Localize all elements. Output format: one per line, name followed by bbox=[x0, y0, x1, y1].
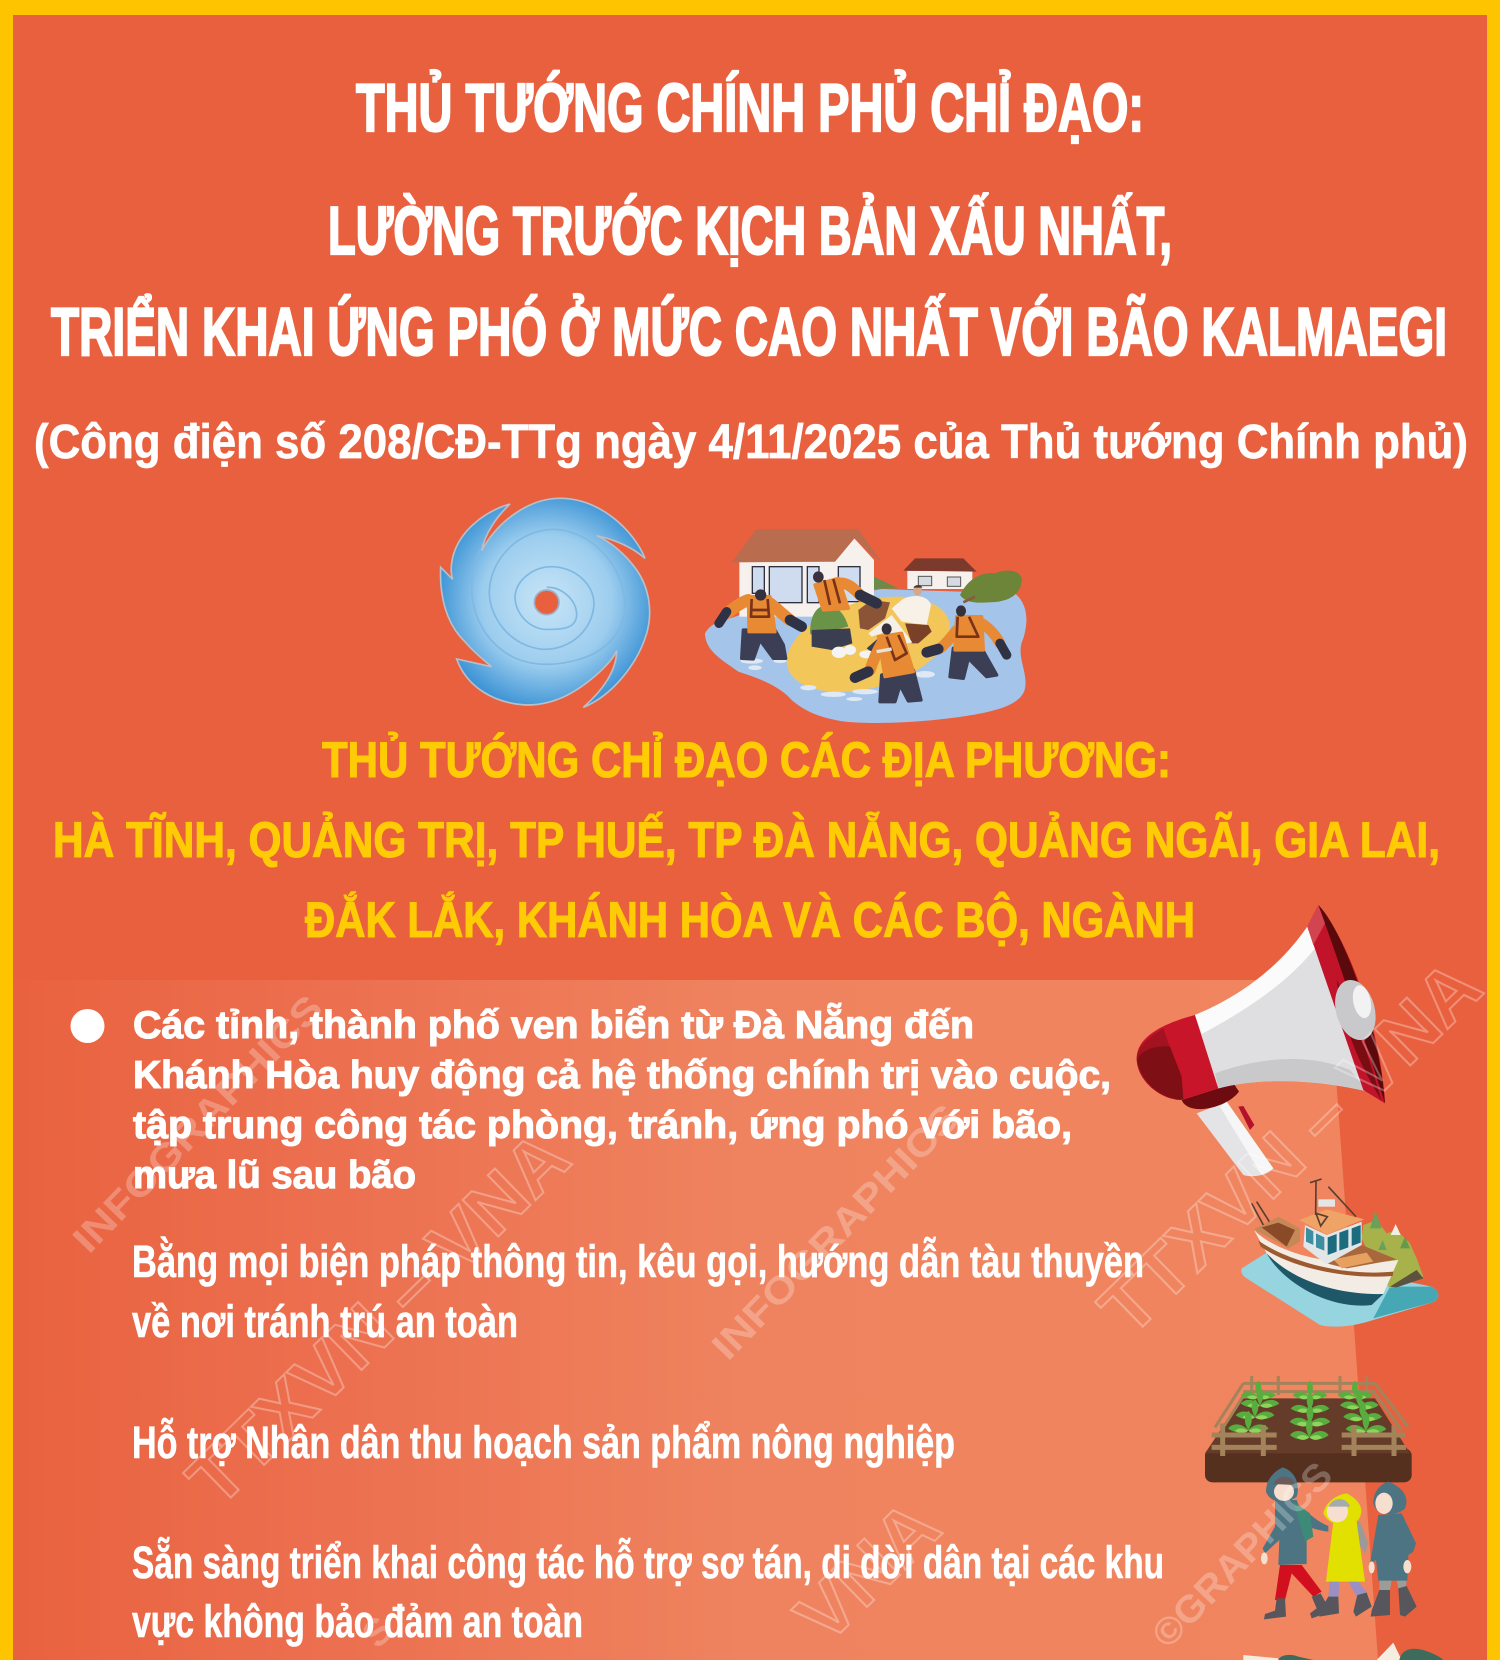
rescue worker: top bbox=[813, 571, 877, 610]
watermarks: VNA bbox=[779, 1484, 955, 1658]
handle bbox=[1197, 1102, 1273, 1176]
rescue worker: front bbox=[855, 623, 921, 702]
flood water bbox=[705, 589, 1026, 723]
survivors in white and brown bbox=[858, 585, 932, 658]
text block: main directive: mưa lũ sau bão bbox=[133, 1154, 416, 1197]
water base bbox=[1241, 1253, 1438, 1327]
icon: farm field bbox=[1205, 1376, 1412, 1482]
bullet bbox=[70, 1009, 104, 1043]
icon: evacuating people bbox=[1261, 1467, 1417, 1619]
collar bbox=[1182, 1084, 1239, 1109]
title bbox=[51, 69, 1447, 370]
rescue worker: left bbox=[719, 589, 802, 659]
panel: directives background bbox=[13, 980, 1378, 1660]
text block: main directive: Khánh Hòa huy động cả hệ thống chính trị vào cuộc, bbox=[133, 1054, 1111, 1097]
heading: provinces: THỦ TƯỚNG CHỈ ĐẠO CÁC ĐỊA PHƯƠNG: bbox=[322, 731, 1171, 788]
mast bbox=[1252, 1179, 1356, 1226]
small house bbox=[903, 558, 977, 589]
heading: provinces: ĐẮK LẮK, KHÁNH HÒA VÀ CÁC BỘ, NGÀNH bbox=[305, 891, 1195, 948]
watermarks: TTXVN – VNA bbox=[171, 1115, 585, 1521]
icon: megaphone bbox=[1137, 905, 1385, 1176]
house bbox=[732, 529, 898, 617]
title: THỦ TƯỚNG CHÍNH PHỦ CHỈ ĐẠO: bbox=[356, 69, 1144, 146]
survivor in green bbox=[810, 605, 856, 658]
front fence bbox=[1212, 1423, 1406, 1456]
text block: main directive: tập trung công tác phòng, tránh, ứng phó với bão, bbox=[133, 1104, 1072, 1147]
icon: fishing boat bbox=[1241, 1179, 1438, 1327]
text block: boats: về nơi tránh trú an toàn bbox=[132, 1296, 518, 1347]
rescue worker: right bbox=[927, 605, 1007, 678]
heading: provinces bbox=[53, 731, 1440, 948]
cabin bbox=[1303, 1222, 1362, 1264]
horn bbox=[1195, 927, 1368, 1092]
text block: evacuation: Sẵn sàng triển khai công tác hỗ trợ sơ tán, di dời dân tại các khu bbox=[132, 1537, 1164, 1588]
rim bbox=[1307, 905, 1385, 1103]
hull bbox=[1254, 1230, 1398, 1295]
watermarks: ©GRAPHICS bbox=[1144, 1454, 1341, 1656]
deck bbox=[1254, 1217, 1300, 1248]
person right bbox=[1369, 1482, 1417, 1617]
dome bbox=[1329, 975, 1382, 1045]
rear bbox=[1137, 1015, 1218, 1100]
text block: main directive: Các tỉnh, thành phố ven biển từ Đà Nẵng đến bbox=[133, 1003, 974, 1047]
icon: partially visible item at bottom bbox=[1243, 1643, 1443, 1660]
watermarks bbox=[65, 944, 1497, 1658]
text block: main directive bbox=[133, 1003, 1111, 1197]
island bbox=[1362, 1211, 1423, 1288]
watermarks: S bbox=[354, 1609, 402, 1656]
text block: evacuation: vực không bảo đảm an toàn bbox=[132, 1596, 583, 1647]
watermarks: INFOGRAPHICS bbox=[65, 988, 332, 1261]
text block: evacuation bbox=[132, 1537, 1164, 1647]
text block: harvest: Hỗ trợ Nhân dân thu hoạch sản phẩm nông nghiệp bbox=[132, 1417, 955, 1468]
text block: boats: Bằng mọi biện pháp thông tin, kêu gọi, hướng dẫn tàu thuyền bbox=[132, 1236, 1144, 1287]
raft bbox=[740, 580, 961, 709]
icon: cyclone bbox=[441, 498, 650, 707]
watermarks: TTXVN – VNA bbox=[1083, 944, 1497, 1350]
person left bbox=[1261, 1467, 1331, 1619]
person middle bbox=[1319, 1493, 1372, 1617]
plants bbox=[1228, 1381, 1386, 1440]
back fence bbox=[1215, 1376, 1408, 1430]
icon: flood rescue scene bbox=[705, 529, 1026, 723]
text block: boats bbox=[132, 1236, 1144, 1347]
bush bbox=[960, 571, 1022, 603]
watermarks: INFOGRAPHICS bbox=[704, 1097, 969, 1368]
